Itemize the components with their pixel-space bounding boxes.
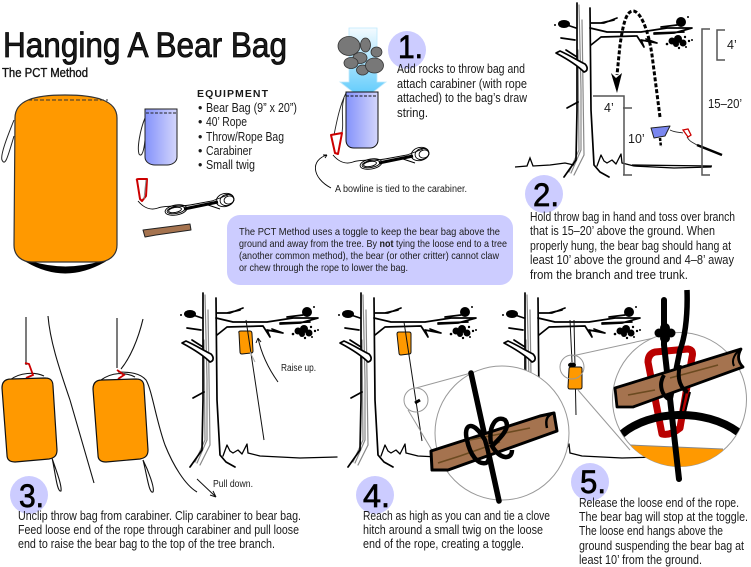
equipment list: Carabiner	[206, 144, 252, 158]
step 5 tree	[502, 293, 659, 467]
step 4 number: 4.	[363, 478, 390, 514]
step 1 text: string.	[397, 106, 428, 120]
measurement brackets	[593, 29, 725, 175]
step 5 text: The loose end hangs above the	[579, 524, 723, 538]
step 1 text	[397, 62, 528, 120]
step 3 text: end to raise the bear bag to the top of the tree branch.	[18, 537, 275, 551]
step 5 text: least 10’ from the ground.	[579, 553, 702, 567]
panel: PCT method explanation	[227, 215, 513, 285]
step 4 text: end of the rope, creating a toggle.	[363, 537, 524, 551]
icon: large orange bear bag	[2, 95, 117, 273]
step 4 number	[356, 476, 394, 514]
step 4 text	[363, 509, 550, 551]
step 2 illustration: tree and throw: 15–20’	[708, 97, 742, 111]
dashed throw path	[617, 11, 660, 117]
step 4 magnifier: clove hitch	[408, 366, 569, 501]
raise up arrow	[256, 338, 278, 382]
equipment list	[197, 88, 297, 172]
panel: PCT method explanation: ground and away from the tree. By not tying the loose end to a tree	[239, 238, 507, 250]
step 3 tree	[180, 293, 337, 467]
step 4 text: hitch around a small twig on the loose	[363, 523, 543, 537]
equipment list: Throw/Rope Bag	[206, 130, 284, 144]
step 2 text: from the branch and tree trunk.	[530, 268, 688, 282]
icon: down arrow	[340, 28, 386, 100]
step 3 text	[18, 509, 301, 551]
icon: carabiner and rope coil	[137, 179, 235, 217]
panel: PCT method explanation: The PCT Method uses a toggle to keep the bear bag above the	[239, 226, 500, 238]
equipment list: EQUIPMENT	[197, 88, 269, 100]
step 3 text: Unclip throw bag from carabiner. Clip carabiner to bear bag.	[18, 509, 301, 523]
step 3 number: 3.	[19, 478, 44, 514]
equipment list: Small twig	[206, 158, 255, 172]
subtitle: The PCT Method	[2, 65, 88, 80]
step 2 illustration: tree and throw: 4’	[727, 38, 737, 52]
step 5 number	[571, 463, 609, 501]
step 2 text	[530, 210, 735, 282]
equipment list: Bear Bag (9” x 20”)	[206, 101, 297, 115]
step 2 illustration: tree and throw	[515, 3, 742, 177]
captions step 3: Pull down.	[213, 479, 253, 490]
step 1 illustration	[315, 28, 430, 188]
step 2 illustration: tree and throw: 10’	[628, 132, 645, 146]
step 3 illustration: bags	[2, 316, 216, 497]
step 5 magnifier: carabiner with toggle	[572, 290, 746, 480]
step 5 number: 5.	[580, 464, 606, 500]
step 3 number	[10, 476, 48, 514]
equipment list: •	[198, 144, 202, 158]
captions step 3: Raise up.	[281, 363, 316, 374]
captions step 3	[213, 363, 316, 490]
step 2 text: that is 15–20’ above the ground. When	[530, 224, 715, 238]
step 1 number	[388, 29, 426, 69]
step 2 number: 2.	[533, 177, 559, 213]
step 5 text	[579, 496, 748, 567]
equipment list: 40’ Rope	[206, 115, 247, 129]
title: Hanging A Bear Bag	[3, 26, 287, 65]
equipment list: •	[198, 115, 202, 129]
step 4 text: Reach as high as you can and tie a clove	[363, 509, 550, 523]
throw bag	[651, 126, 670, 138]
equipment list: •	[198, 130, 202, 144]
step 2 number	[525, 175, 563, 213]
panel: PCT method explanation: or chew through the rope to lower the bag.	[239, 262, 408, 274]
pull down arrow	[197, 479, 216, 497]
equipment list: •	[198, 158, 202, 172]
panel: PCT method explanation: (another common method), the bear (or other critter) cannot claw	[239, 250, 499, 262]
caption: bowline: A bowline is tied to the carabiner.	[335, 184, 467, 195]
step 1 text: attached) to the bag’s draw	[397, 91, 528, 105]
step 1 text: attach carabiner (with rope	[397, 77, 527, 91]
step 1 text: Add rocks to throw bag and	[397, 62, 525, 76]
step 4 tree	[338, 293, 495, 467]
step 1 number: 1.	[398, 29, 423, 65]
step 3 text: Feed loose end of the rope through carabiner and pull loose	[18, 523, 299, 537]
equipment list: •	[198, 101, 202, 115]
icon: small blue throw bag	[138, 109, 177, 165]
icon: small twig	[143, 224, 191, 237]
step 2 illustration: tree and throw: 4’	[604, 101, 614, 115]
